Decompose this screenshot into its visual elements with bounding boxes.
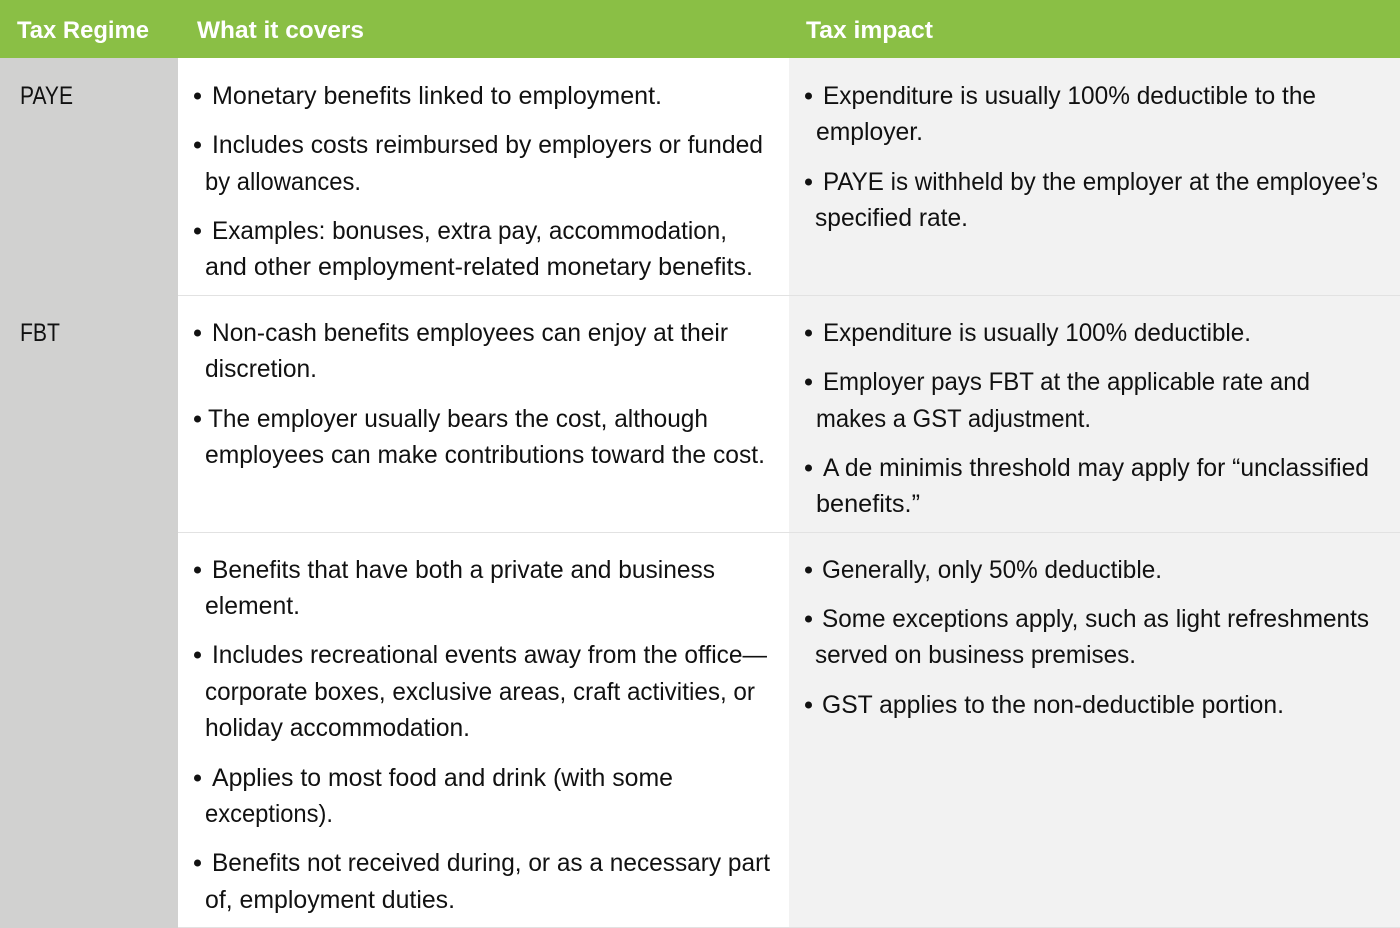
third row: tax impact: Generally, only 50% deductible. xyxy=(822,556,1162,584)
third row: tax impact: Some exceptions apply, such as light refreshments xyxy=(822,605,1369,633)
FBT: what it covers: Non-cash benefits employees can enjoy at their xyxy=(212,319,728,347)
PAYE: what it covers: Examples: bonuses, extra pay, accommodation, xyxy=(212,217,727,245)
heading: Tax Regime: Tax Regime xyxy=(17,17,149,44)
heading: What it covers: What it covers xyxy=(197,17,364,44)
heading: Tax impact: Tax impact xyxy=(806,17,933,44)
PAYE: what it covers: and other employment-related monetary benefits. xyxy=(205,253,753,281)
third row: what it covers: exceptions). xyxy=(205,800,333,828)
third row: tax impact: GST applies to the non-deductible portion. xyxy=(822,691,1284,719)
third row: what it covers: Benefits that have both a private and business xyxy=(212,556,715,584)
third row: what it covers: Includes recreational events away from the office— xyxy=(212,641,767,669)
PAYE: what it covers: by allowances. xyxy=(205,168,361,196)
PAYE: tax impact: specified rate. xyxy=(815,204,968,232)
FBT: tax impact: A de minimis threshold may apply for “unclassified xyxy=(823,454,1369,482)
header row xyxy=(0,0,1400,58)
FBT: tax impact: benefits.” xyxy=(816,490,920,518)
PAYE: tax impact: employer. xyxy=(816,118,923,146)
PAYE: tax impact: PAYE is withheld by the employer at the employee’s xyxy=(823,168,1378,196)
row label: PAYE: PAYE xyxy=(20,82,73,110)
PAYE: what it covers: Includes costs reimbursed by employers or funded xyxy=(212,131,763,159)
FBT: what it covers: The employer usually bears the cost, although xyxy=(208,405,708,433)
FBT: what it covers: employees can make contributions toward the cost. xyxy=(205,441,765,469)
PAYE: tax impact: Expenditure is usually 100% deductible to the xyxy=(823,82,1316,110)
row label: FBT: FBT xyxy=(20,319,60,347)
third row: what it covers: holiday accommodation. xyxy=(205,714,470,742)
PAYE: what it covers: Monetary benefits linked to employment. xyxy=(212,82,662,110)
FBT: what it covers xyxy=(194,319,765,469)
third row: what it covers: corporate boxes, exclusive areas, craft activities, or xyxy=(205,678,755,706)
third row: what it covers: element. xyxy=(205,592,300,620)
FBT: tax impact: makes a GST adjustment. xyxy=(816,405,1091,433)
third row: what it covers: Benefits not received during, or as a necessary part xyxy=(212,849,770,877)
FBT: tax impact: Employer pays FBT at the applicable rate and xyxy=(823,368,1310,396)
PAYE: what it covers xyxy=(194,82,763,281)
FBT: tax impact: Expenditure is usually 100% deductible. xyxy=(823,319,1251,347)
third row: tax impact: served on business premises. xyxy=(815,641,1136,669)
PAYE: tax impact xyxy=(805,82,1378,232)
third row: what it covers: Applies to most food and drink (with some xyxy=(212,764,673,792)
third row: what it covers: of, employment duties. xyxy=(205,886,455,914)
FBT: what it covers: discretion. xyxy=(205,355,317,383)
third row: what it covers xyxy=(194,556,770,914)
FBT: tax impact xyxy=(805,319,1369,518)
third row: tax impact xyxy=(805,556,1369,719)
